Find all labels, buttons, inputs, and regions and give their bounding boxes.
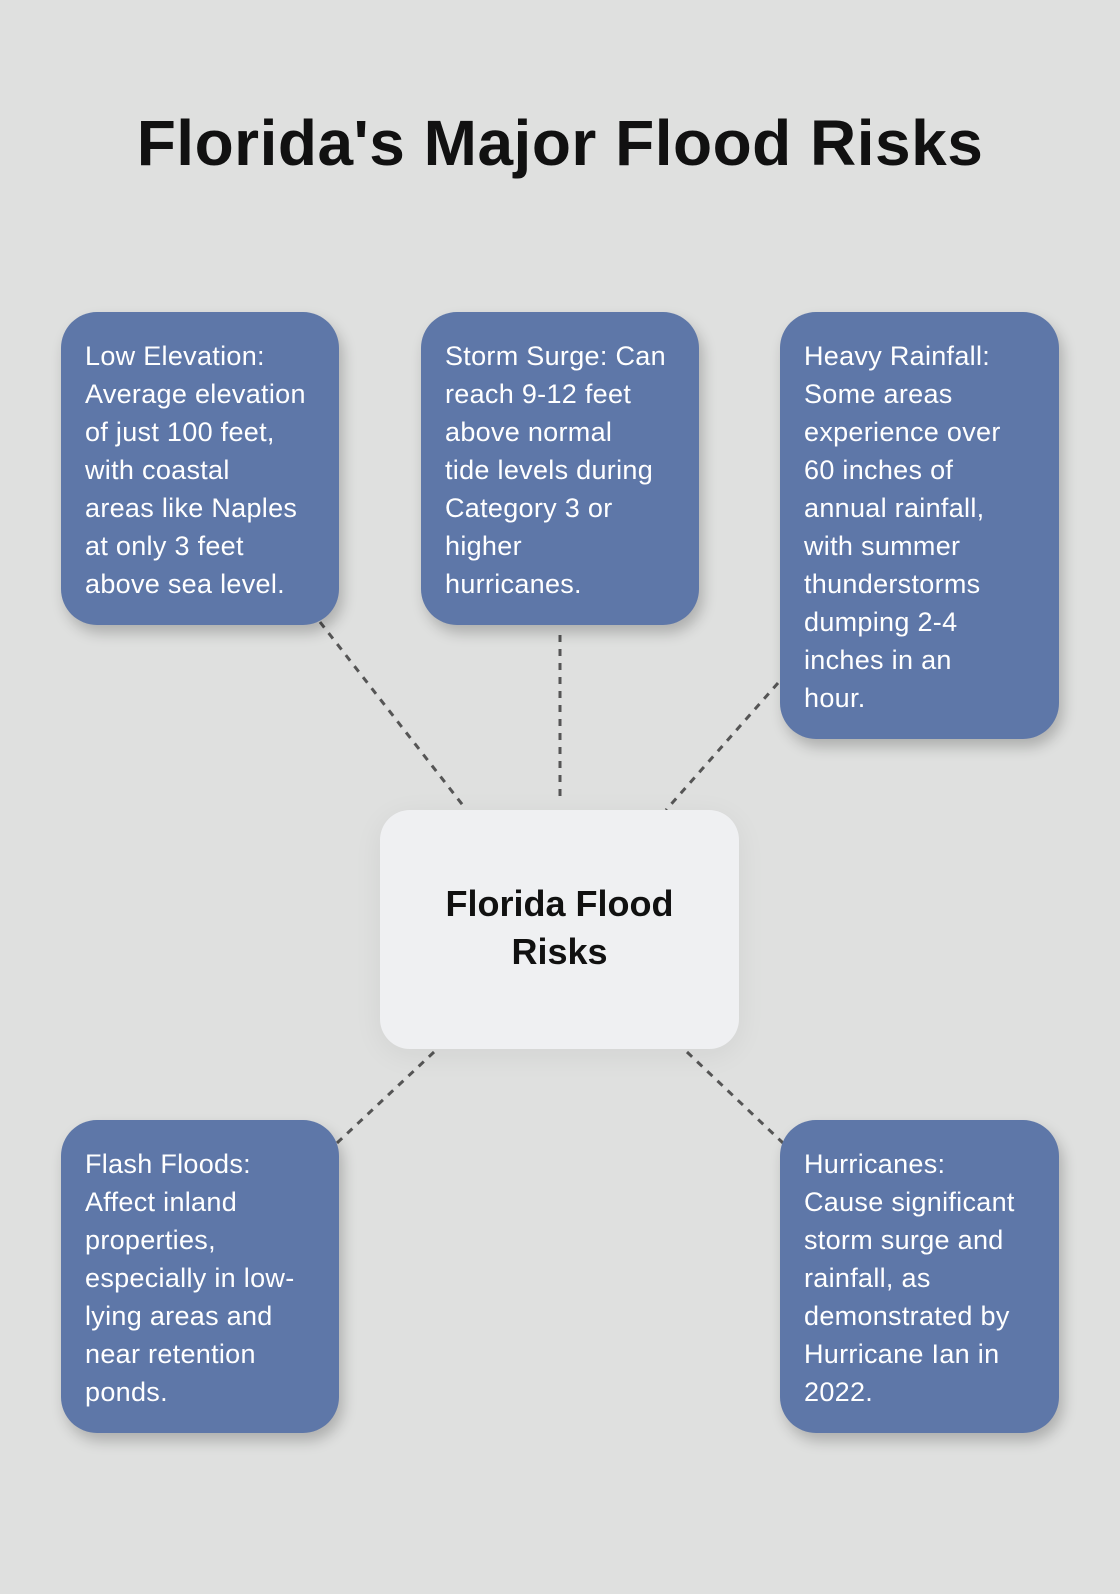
panel: heavy rainfall: annual rainfall, <box>804 493 984 523</box>
panel: storm surge: higher <box>445 531 522 561</box>
panel: storm surge: hurricanes. <box>445 569 582 599</box>
panel: hurricanes: Hurricanes: <box>804 1149 945 1179</box>
panel: heavy rainfall <box>780 312 1059 739</box>
center node: Risks <box>511 931 608 972</box>
panel: low elevation: at only 3 feet <box>85 531 244 561</box>
panel: heavy rainfall: Heavy Rainfall: <box>804 341 990 371</box>
panel: flash floods: near retention <box>85 1339 256 1369</box>
panel: flash floods: Flash Floods: <box>85 1149 251 1179</box>
panel: heavy rainfall: with summer <box>804 531 960 561</box>
panel: hurricanes: Cause significant <box>804 1187 1015 1217</box>
panel: heavy rainfall: Some areas <box>804 379 953 409</box>
panel: heavy rainfall: thunderstorms <box>804 569 980 599</box>
center node: Florida Flood <box>446 883 673 924</box>
panel: hurricanes: storm surge and <box>804 1225 1004 1255</box>
panel: low elevation: above sea level. <box>85 569 285 599</box>
panel: hurricanes: demonstrated by <box>804 1301 1010 1331</box>
center node <box>380 810 739 1049</box>
title: Florida's Major Flood Risks <box>137 107 983 179</box>
panel: storm surge: Category 3 or <box>445 493 612 523</box>
panel: flash floods: lying areas and <box>85 1301 273 1331</box>
panel: flash floods: Affect inland <box>85 1187 237 1217</box>
panel: hurricanes: 2022. <box>804 1377 873 1407</box>
panel: storm surge: reach 9-12 feet <box>445 379 631 409</box>
panel: low elevation: of just 100 feet, <box>85 417 275 447</box>
panel: low elevation <box>61 312 339 625</box>
panel: storm surge: Storm Surge: Can <box>445 341 666 371</box>
panel: low elevation: Average elevation <box>85 379 306 409</box>
panel: flash floods <box>61 1120 339 1433</box>
panel: hurricanes: Hurricane Ian in <box>804 1339 999 1369</box>
panel: low elevation: areas like Naples <box>85 493 297 523</box>
panel: heavy rainfall: 60 inches of <box>804 455 953 485</box>
panel: flash floods: ponds. <box>85 1377 168 1407</box>
panel: flash floods: especially in low- <box>85 1263 294 1293</box>
panel: storm surge: above normal <box>445 417 612 447</box>
panel: hurricanes: rainfall, as <box>804 1263 931 1293</box>
panel: hurricanes <box>780 1120 1059 1433</box>
panel: heavy rainfall: dumping 2-4 <box>804 607 957 637</box>
panel: heavy rainfall: inches in an <box>804 645 952 675</box>
panel: low elevation: Low Elevation: <box>85 341 265 371</box>
panel: flash floods: properties, <box>85 1225 216 1255</box>
panel: heavy rainfall: hour. <box>804 683 866 713</box>
panel: heavy rainfall: experience over <box>804 417 1001 447</box>
panel: storm surge: tide levels during <box>445 455 653 485</box>
panel: low elevation: with coastal <box>85 455 230 485</box>
panel: storm surge <box>421 312 699 625</box>
